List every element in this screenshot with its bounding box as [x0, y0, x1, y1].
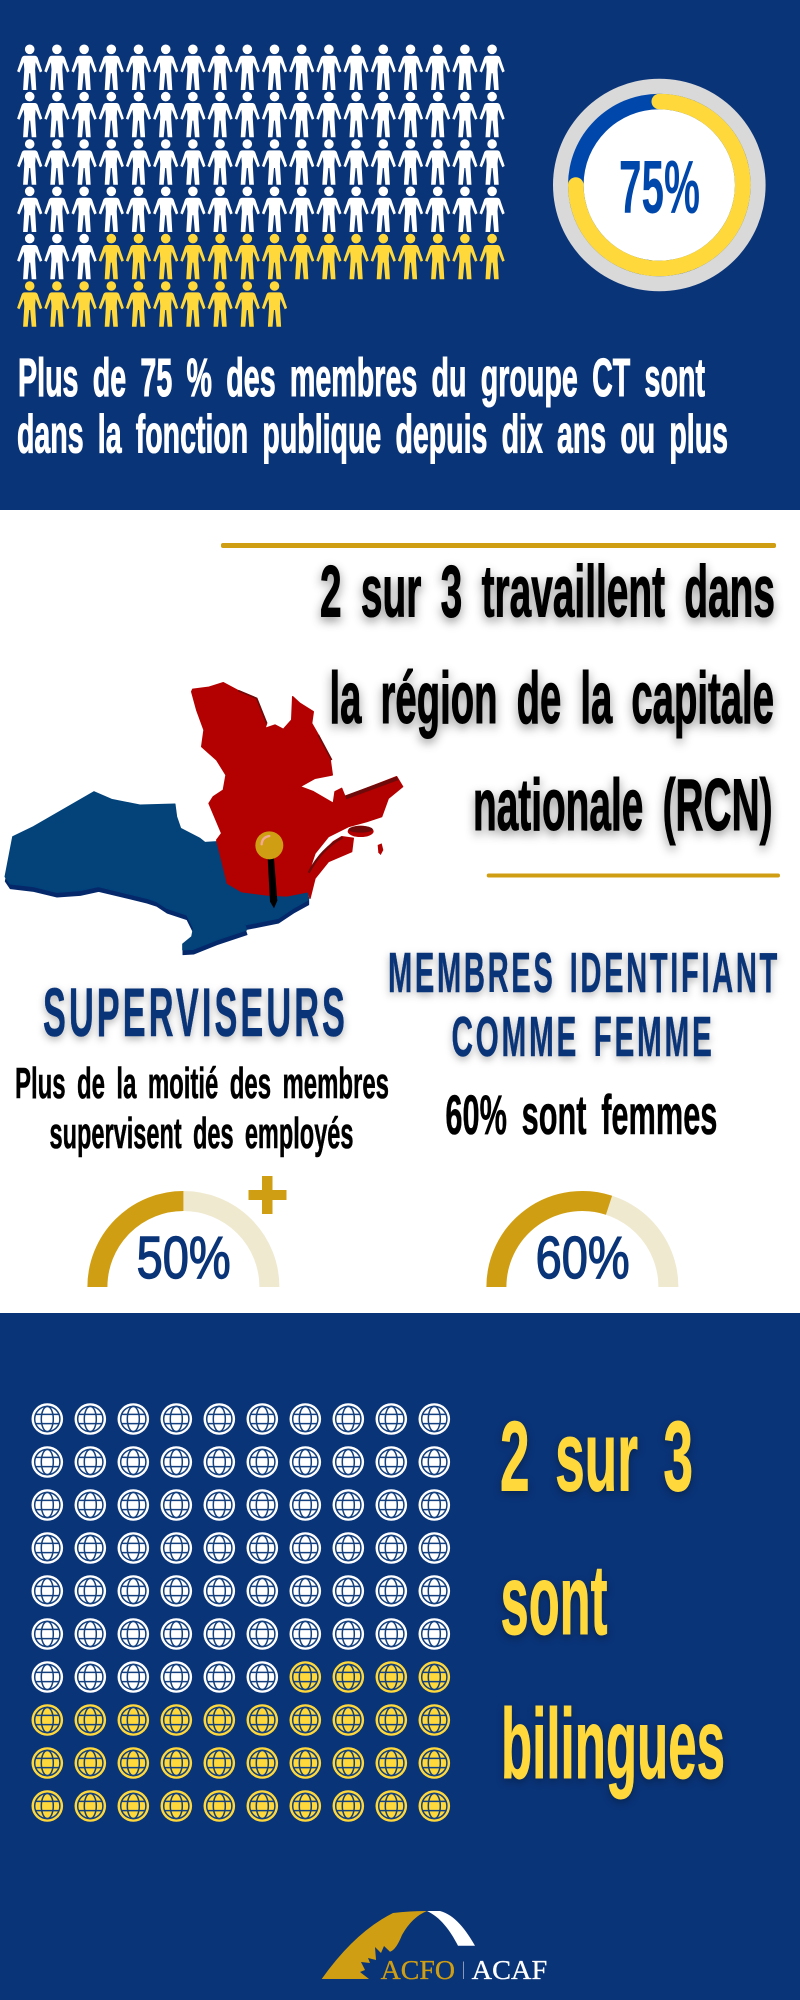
heading: region	[320, 552, 775, 846]
gauge: 50%: 50%	[137, 1225, 231, 1291]
block: supervisors: SUPERVISEURS	[43, 974, 348, 1051]
map: Ontario	[5, 792, 309, 955]
logo: ACFO ACAF: ACFO	[381, 1955, 455, 1985]
text: supervisors statement: Plus de la moitié des membres	[15, 1059, 389, 1108]
panel: years of service	[0, 0, 800, 510]
panel: bilingualism	[0, 1313, 800, 2000]
map: Ontario and Quebec with pin	[5, 683, 403, 955]
text: two of three are bilingual: sont	[500, 1544, 608, 1655]
icon: plus sign	[248, 1176, 286, 1214]
gauge: 50%	[97, 1201, 269, 1291]
icon: map pin	[255, 831, 283, 908]
gauge: 60%	[496, 1201, 668, 1291]
pictogram: 100 people, 75 highlighted	[17, 44, 505, 327]
map: Quebec	[192, 683, 403, 898]
heading: women members	[388, 941, 780, 1069]
text: supervisors statement: supervisent des employés	[50, 1109, 354, 1158]
pictogram: 100 globes, 66 highlighted as bilingual	[32, 1403, 450, 1822]
block: supervisors	[15, 974, 389, 1291]
donut chart: 75%	[553, 79, 766, 291]
gauge: 60%: 60%	[536, 1225, 630, 1291]
text: two of three are bilingual	[500, 1401, 725, 1799]
donut chart: 75%: 75%	[619, 145, 700, 229]
panel: region, supervisors and women	[0, 510, 800, 1313]
text: service statement	[17, 348, 728, 465]
logo: ACFO ACAF	[322, 1911, 547, 1985]
text: supervisors statement	[15, 1059, 389, 1158]
block: women members	[388, 941, 780, 1291]
logo: ACFO ACAF: ACAF	[472, 1955, 547, 1985]
